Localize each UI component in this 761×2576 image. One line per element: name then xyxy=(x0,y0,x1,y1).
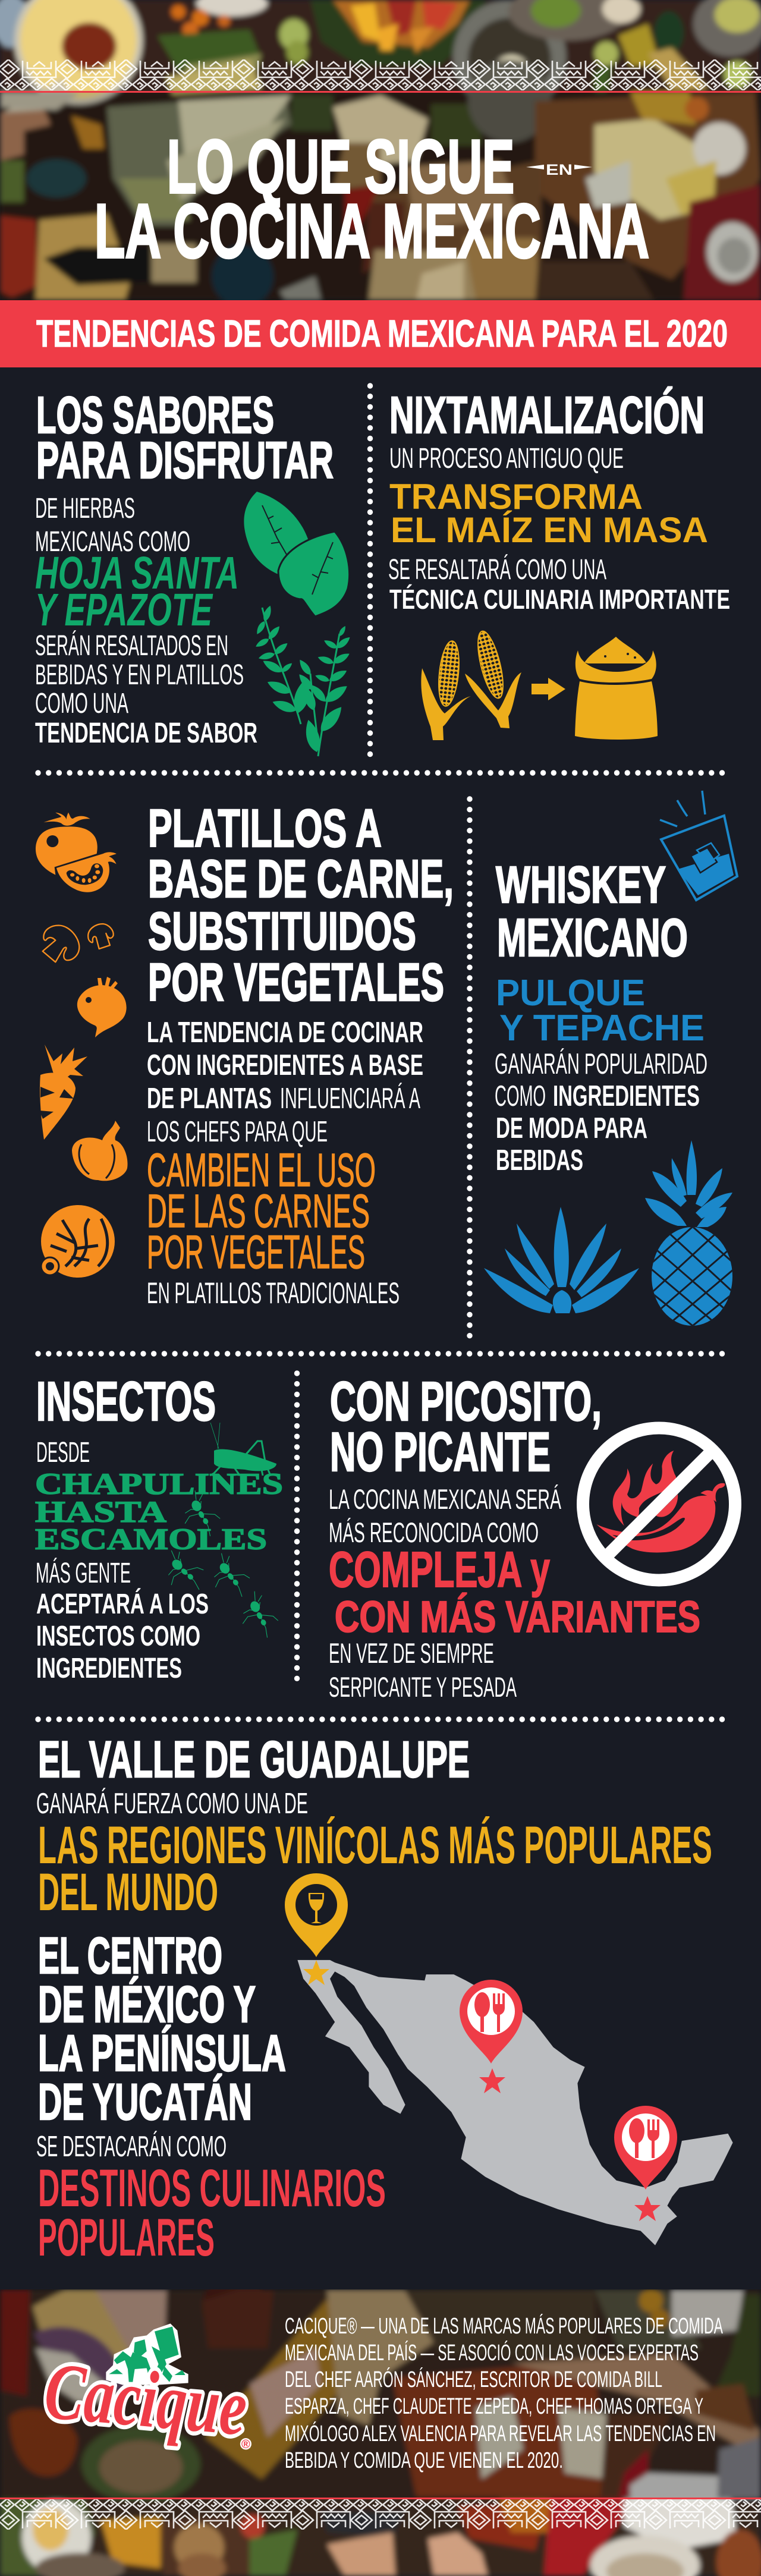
text block: COMO UNA xyxy=(35,688,128,719)
text block: centro de mexico: EL CENTRO xyxy=(38,1927,222,1984)
text block: INSECTOS COMO xyxy=(36,1621,200,1652)
panel: regiones xyxy=(36,1731,733,2267)
map pin: food, centro xyxy=(460,1980,523,2064)
text block: PULQUE xyxy=(496,973,645,1014)
icon: corn to masa xyxy=(421,629,658,740)
icon: hoja santa leaves xyxy=(244,492,350,617)
map of Mexico xyxy=(297,1960,733,2245)
heading: POR VEGETALES xyxy=(148,953,444,1012)
icon: mushrooms xyxy=(43,924,114,962)
icon: carrot xyxy=(39,1045,87,1140)
text block: DESDE xyxy=(36,1437,90,1468)
icon: lettuce xyxy=(41,1205,115,1278)
text block: HASTA xyxy=(35,1496,166,1529)
text block: SE RESALTARÁ COMO UNA xyxy=(388,554,606,586)
icon: crossed-out chili xyxy=(583,1428,735,1580)
text block: LOS CHEFS PARA QUE xyxy=(147,1116,328,1148)
text block: centro de mexico: DE MÉXICO Y xyxy=(38,1976,256,2033)
text block: DE PLANTAS xyxy=(147,1083,272,1115)
text block: DE LAS CARNES xyxy=(147,1184,370,1237)
panel: platillos a base de carne xyxy=(36,799,454,1310)
icon: agave xyxy=(484,1207,639,1313)
text block: DE MODA PARA xyxy=(496,1112,647,1144)
footer food photo xyxy=(0,2274,761,2576)
text block: POR VEGETALES xyxy=(147,1225,365,1278)
panel: con picosito xyxy=(329,1370,735,1703)
logo emblem xyxy=(106,2323,188,2385)
icon: radish xyxy=(77,977,127,1037)
heading: SUBSTITUIDOS xyxy=(148,902,416,961)
text block: centro de mexico: DE YUCATÁN xyxy=(38,2074,252,2131)
text block: centro de mexico: SE DESTACARÁN COMO xyxy=(36,2131,227,2163)
text block: MEXICANAS COMO xyxy=(35,526,190,558)
star: valle de guadalupe xyxy=(303,1960,329,1985)
text block: INFLUENCIARÁ A xyxy=(280,1083,420,1115)
text block: CAMBIEN EL USO xyxy=(147,1143,376,1196)
text block: CHAPULINES xyxy=(35,1468,283,1501)
heading xyxy=(148,799,454,1012)
text block xyxy=(147,1017,423,1310)
text block: LA COCINA MEXICANA SERÁ xyxy=(329,1483,561,1515)
text block: TRANSFORMA xyxy=(389,477,643,517)
banner xyxy=(0,300,761,367)
text block: centro de mexico xyxy=(36,1927,386,2267)
panel: whiskey mexicano xyxy=(484,791,737,1338)
icon: epazote xyxy=(254,605,352,756)
star: yucatan xyxy=(634,2196,661,2221)
text block: MÁS RECONOCIDA COMO xyxy=(329,1517,539,1548)
icon: bell pepper xyxy=(72,1121,128,1181)
text block: COMPLEJA y xyxy=(329,1542,550,1597)
icon: tomato xyxy=(36,813,117,892)
icon: grasshopper xyxy=(210,1423,276,1476)
text block: valle de guadalupe: GANARÁ FUERZA COMO UNA DE xyxy=(36,1788,308,1820)
text block: LA TENDENCIA DE COCINAR xyxy=(147,1017,423,1049)
logo: cacique xyxy=(41,2323,250,2453)
text block: SERPICANTE Y PESADA xyxy=(329,1671,517,1703)
text block: valle de guadalupe xyxy=(36,1731,712,1921)
icon: whiskey glass xyxy=(660,791,737,900)
panel: nixtamalizacion xyxy=(388,386,730,740)
text block: centro de mexico: LA PENÍNSULA xyxy=(38,2025,286,2082)
decorative tribal band bottom xyxy=(0,2499,761,2530)
registered mark: ® xyxy=(241,2438,250,2451)
text block: TENDENCIA DE SABOR xyxy=(35,718,257,749)
text block: valle de guadalupe: EL VALLE DE GUADALUPE xyxy=(38,1731,470,1788)
text block: centro de mexico: DESTINOS CULINARIOS xyxy=(38,2158,386,2218)
text block: INGREDIENTES xyxy=(36,1653,182,1684)
text block: ESCAMOLES xyxy=(35,1523,267,1556)
text block: Y EPAZOTE xyxy=(35,584,213,636)
about text: BEBIDA Y COMIDA QUE VIENEN EL 2020. xyxy=(285,2448,563,2473)
text block: CON INGREDIENTES A BASE xyxy=(147,1049,423,1081)
about text xyxy=(285,2313,723,2473)
heading: NO PICANTE xyxy=(330,1421,551,1483)
text block: Y TEPACHE xyxy=(499,1008,705,1049)
heading: BASE DE CARNE, xyxy=(148,850,454,909)
title: EN xyxy=(546,162,573,178)
text block xyxy=(495,973,707,1177)
heading: PARA DISFRUTAR xyxy=(36,432,334,489)
text block: centro de mexico: POPULARES xyxy=(38,2207,215,2267)
panel: insectos xyxy=(35,1370,284,1684)
text block: EN PLATILLOS TRADICIONALES xyxy=(147,1276,400,1310)
heading xyxy=(36,386,334,489)
text block: COMO xyxy=(495,1080,546,1112)
map pin: food, yucatan xyxy=(614,2106,677,2190)
text block: EN VEZ DE SIEMPRE xyxy=(329,1637,494,1669)
logo wordmark: Cacique xyxy=(41,2346,250,2453)
text block xyxy=(388,443,730,615)
icon: ants xyxy=(166,1489,284,1639)
icon: pineapple xyxy=(645,1140,732,1326)
text block: MÁS GENTE xyxy=(36,1558,131,1589)
heading: WHISKEY xyxy=(496,856,666,914)
header food photo xyxy=(0,0,761,307)
heading xyxy=(496,856,688,968)
text block: HOJA SANTA xyxy=(35,548,239,599)
title xyxy=(95,124,649,274)
map pin: wine xyxy=(285,1873,348,1957)
text block xyxy=(35,1437,283,1684)
text block: ACEPTARÁ A LOS xyxy=(36,1588,209,1620)
text block: BEBIDAS Y EN PLATILLOS xyxy=(35,659,244,691)
text block: valle de guadalupe: DEL MUNDO xyxy=(38,1862,218,1921)
panel: los sabores xyxy=(35,386,352,756)
text block: EL MAÍZ EN MASA xyxy=(391,510,708,550)
heading: INSECTOS xyxy=(36,1370,216,1432)
dotted dividers xyxy=(38,386,728,1719)
text block: DE HIERBAS xyxy=(35,493,135,524)
heading: CON PICOSITO, xyxy=(330,1370,602,1432)
heading: PLATILLOS A xyxy=(148,799,382,858)
heading xyxy=(330,1370,602,1483)
decorative tribal band top xyxy=(0,59,761,90)
title: LO QUE SIGUE xyxy=(167,124,514,209)
text block: BEBIDAS xyxy=(496,1144,583,1177)
text block xyxy=(35,493,257,749)
heading: LOS SABORES xyxy=(36,386,274,444)
star: centro xyxy=(479,2068,505,2093)
text block xyxy=(329,1483,700,1703)
text block: SERÁN RESALTADOS EN xyxy=(35,630,228,662)
